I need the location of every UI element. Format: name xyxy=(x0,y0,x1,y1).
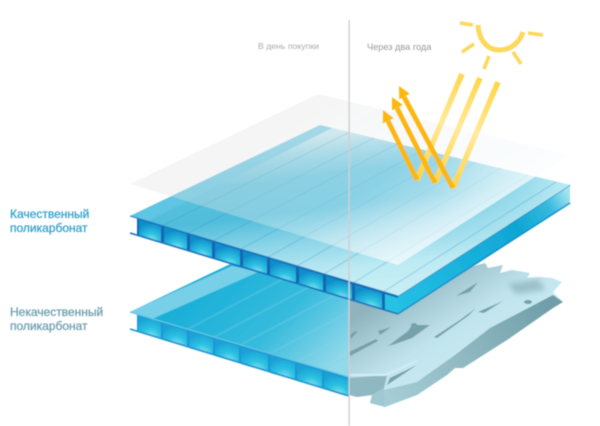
transparent protective film xyxy=(130,94,569,265)
upper sheet: quality polycarbonate xyxy=(130,125,570,314)
degraded right half xyxy=(349,263,563,407)
label: quality polycarbonate: поликарбонат xyxy=(10,221,88,235)
shadow patch on degraded sheet xyxy=(508,279,546,294)
text: two years later caption: Через два года xyxy=(367,42,431,52)
lower sheet front cells xyxy=(130,312,349,396)
label: quality polycarbonate xyxy=(10,207,90,236)
upper sheet front cells xyxy=(130,218,398,314)
lower sheet: poor polycarbonate xyxy=(129,262,564,408)
illustration: polycarbonate sheets xyxy=(129,20,571,426)
tears in the degraded sheet xyxy=(349,282,532,385)
upper sheet top face xyxy=(130,125,570,296)
upper sheet right edge xyxy=(398,185,570,314)
label: poor polycarbonate: поликарбонат xyxy=(10,319,88,333)
incoming sun rays xyxy=(417,74,498,188)
lower sheet top face xyxy=(131,263,350,377)
divider line xyxy=(348,20,350,426)
label: quality polycarbonate: Качественный xyxy=(10,207,89,221)
sun icon xyxy=(460,23,543,69)
label: poor polycarbonate xyxy=(10,305,104,334)
reflected arrows xyxy=(383,86,453,188)
text: purchase day caption: В день покупки xyxy=(258,41,319,51)
label: poor polycarbonate: Некачественный xyxy=(10,305,103,319)
